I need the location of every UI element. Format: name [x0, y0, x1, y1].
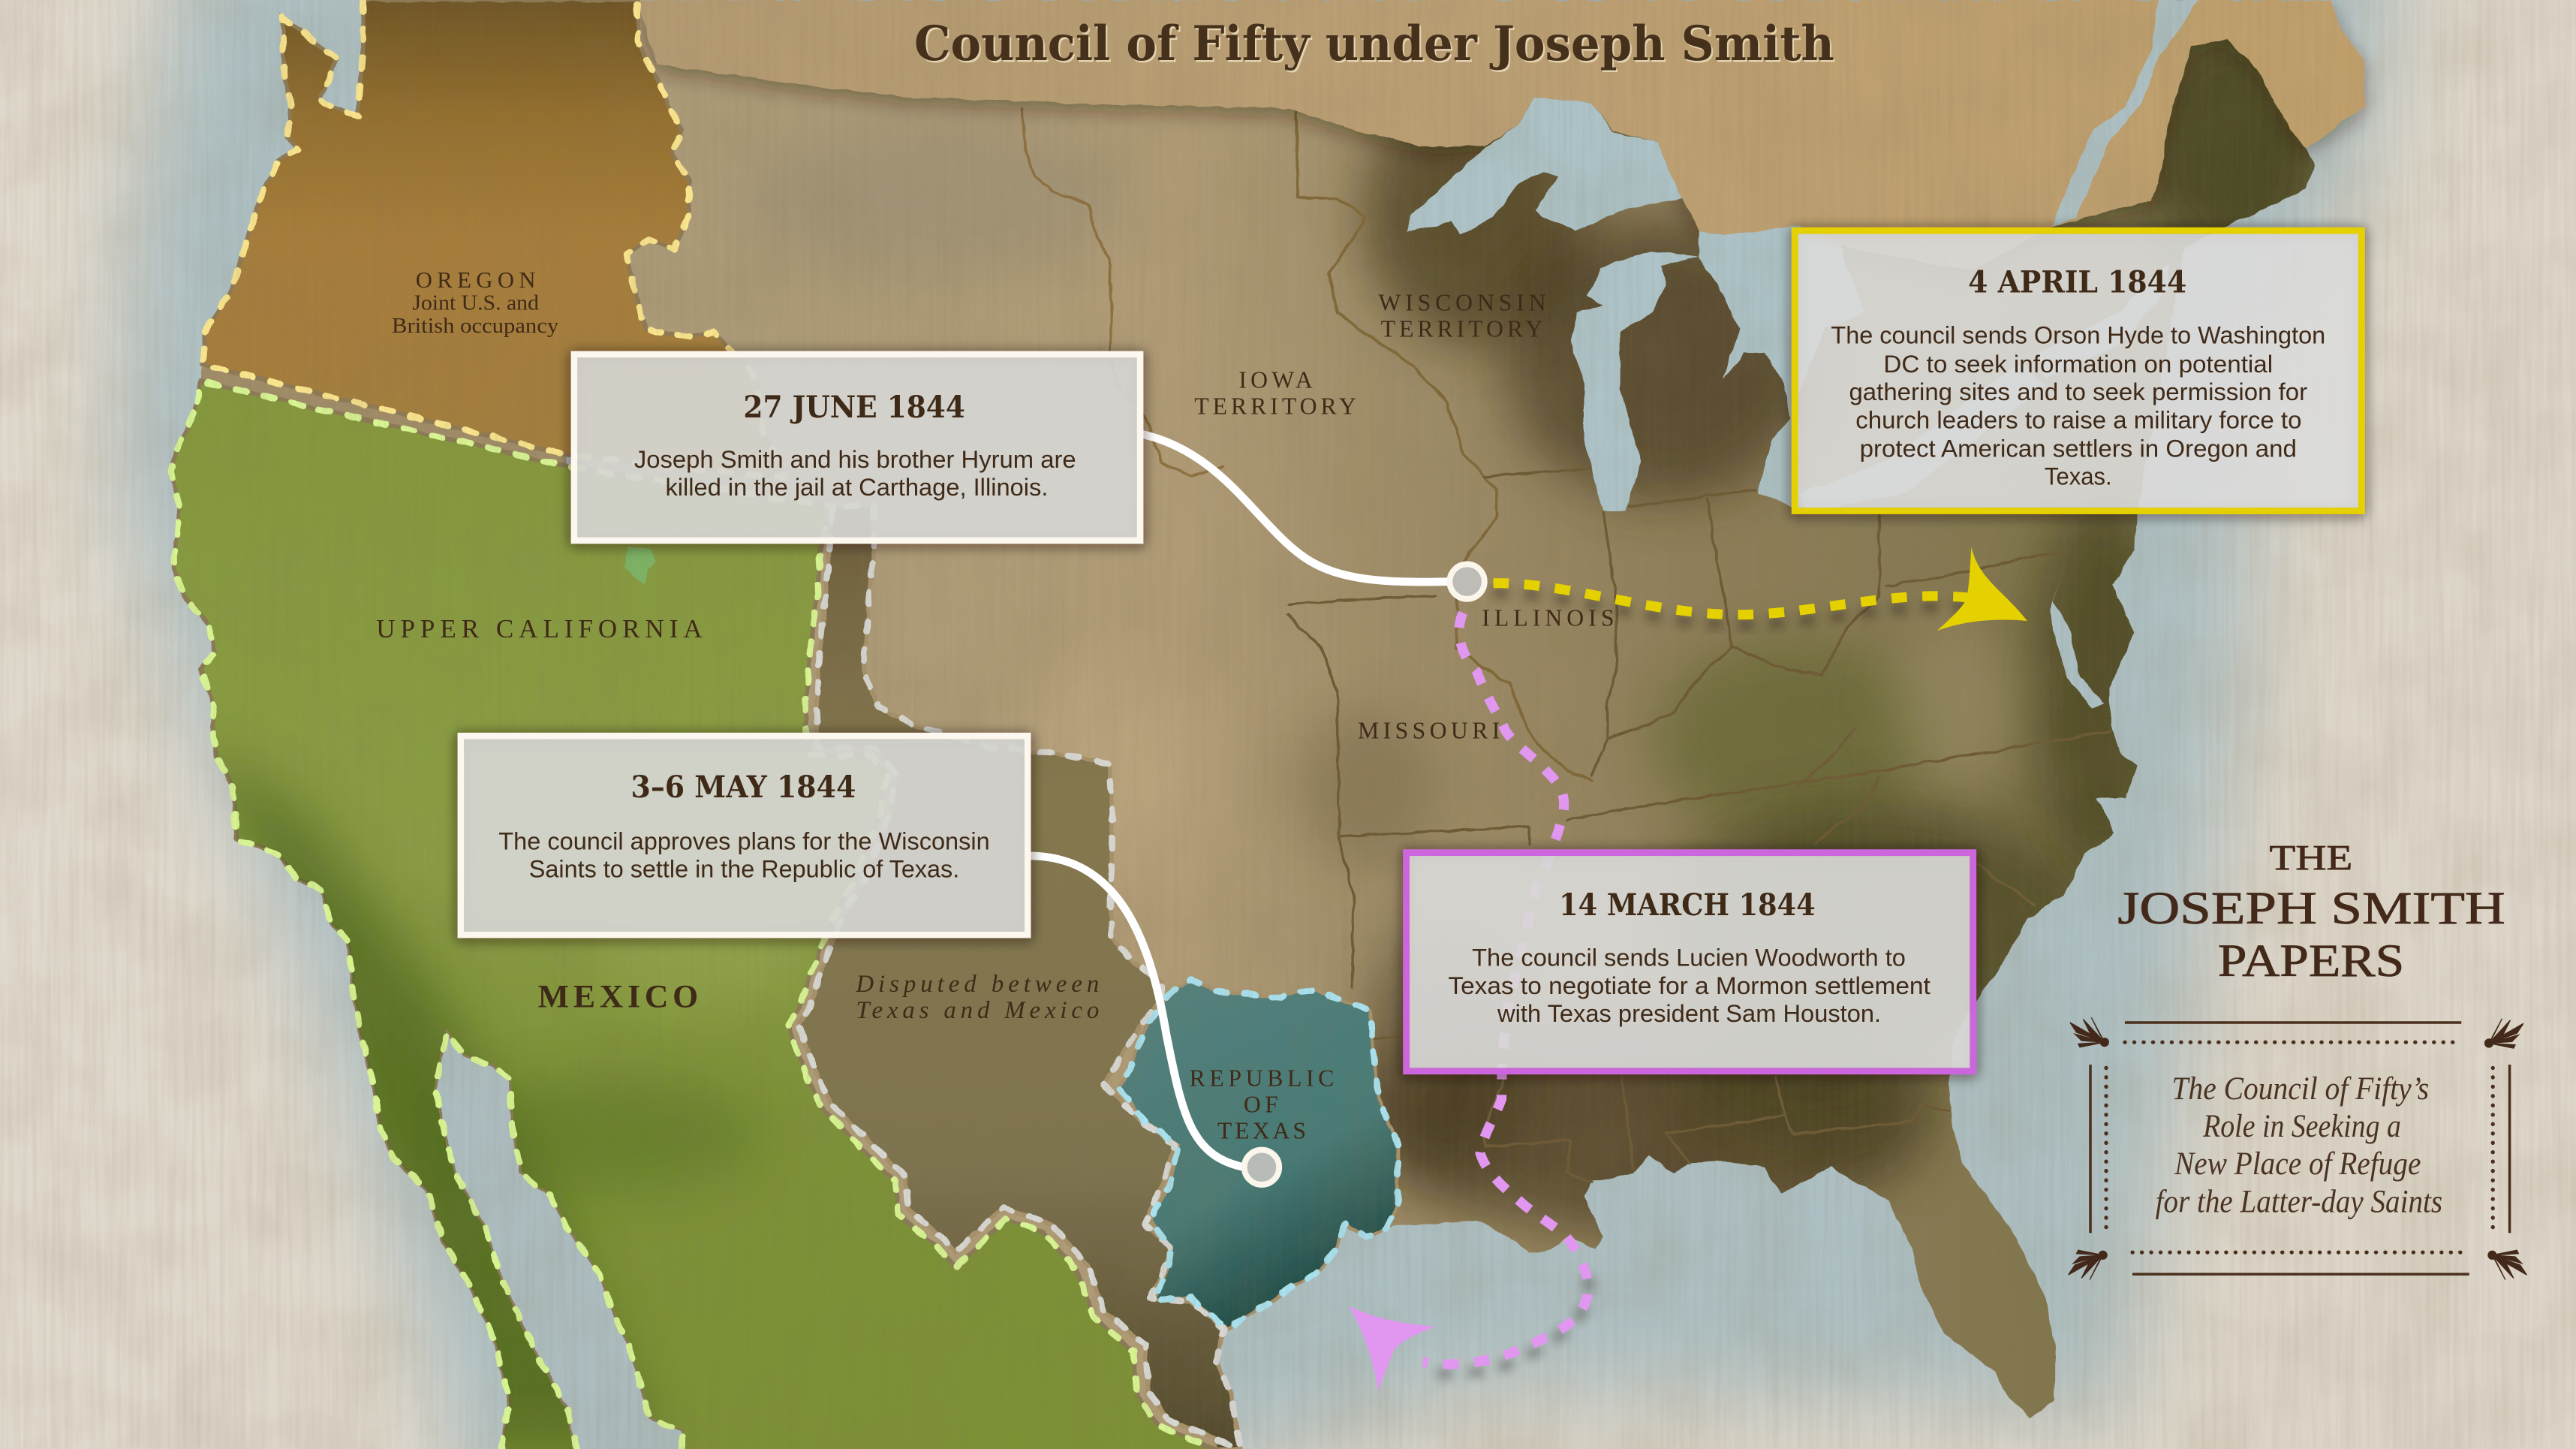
label: Oregon: OREGON — [416, 267, 536, 293]
subtitle: The Council of Fifty’s — [2172, 1071, 2429, 1107]
water: Saint Lawrence River — [2052, 0, 2200, 227]
title: Council of Fifty under Joseph Smith — [916, 17, 1836, 73]
flourish: bottom right — [2488, 1250, 2526, 1280]
dashed border: disputed territory — [799, 506, 1241, 1449]
rivers and state lines — [1022, 108, 2156, 1183]
dashed border: Republic of Texas — [1121, 979, 1398, 1329]
water: Lake Erie and Lake Ontario — [1799, 361, 2045, 513]
label: Wisconsin Territory: WISCONSIN — [1378, 290, 1546, 316]
water: Lake Huron — [1699, 227, 1864, 509]
seam between Oregon and Upper California — [200, 365, 567, 466]
label: Wisconsin Territory: TERRITORY — [1381, 316, 1542, 342]
region: Mexico and Upper California — [171, 381, 1248, 1449]
body text: protect American settlers in Oregon and — [1860, 434, 2297, 462]
subtitle: for the Latter-day Saints — [2156, 1183, 2442, 1219]
label: Upper California: UPPER CALIFORNIA — [376, 614, 703, 643]
label: Oregon: Joint U.S. and — [412, 291, 539, 315]
label: Iowa Territory: IOWA — [1238, 366, 1313, 393]
arrowhead: pink — [1349, 1306, 1436, 1391]
body text: killed in the jail at Carthage, Illinois. — [665, 473, 1048, 501]
subtitle: New Place of Refuge — [2174, 1146, 2421, 1182]
body text: Texas. — [2045, 462, 2112, 490]
marker: Carthage, Illinois — [1449, 564, 1485, 599]
water: Gulf of California — [435, 1032, 682, 1449]
route: Orson Hyde to Washington, yellow dashed — [1494, 547, 2027, 631]
logo: The Joseph Smith Papers — [2117, 839, 2505, 987]
body text — [1448, 944, 1930, 1027]
label: Republic of Texas: OF — [1244, 1091, 1278, 1117]
label: Mexico: MEXICO — [538, 978, 698, 1014]
dashed border: Oregon — [202, 0, 785, 478]
land: United States — [567, 0, 2315, 1449]
marker: Republic of Texas settlement — [1244, 1150, 1279, 1185]
land: Canada — [637, 0, 2364, 271]
label: Republic of Texas — [1190, 1065, 1334, 1143]
label: Republic of Texas: TEXAS — [1217, 1117, 1306, 1143]
body text: with Texas president Sam Houston. — [1497, 999, 1881, 1027]
title: Council of Fifty under Joseph Smith — [914, 15, 1834, 71]
route: April mission shadow — [1494, 593, 1972, 625]
heading: 3–6 MAY 1844 — [630, 769, 856, 805]
green stain near Upper California — [624, 545, 655, 585]
body text: gathering sites and to seek permission for — [1849, 378, 2307, 405]
body text: The council sends Lucien Woodworth to — [1472, 944, 1906, 972]
label: Republic of Texas: REPUBLIC — [1190, 1065, 1334, 1091]
body text — [498, 827, 990, 883]
body text: DC to seek information on potential — [1883, 350, 2273, 378]
body text: Texas to negotiate for a Mormon settlement — [1448, 972, 1930, 999]
water: Lake Superior — [1407, 98, 1682, 235]
logo: The Joseph Smith Papers: THE — [2270, 839, 2352, 878]
heading: 4 APRIL 1844 — [1968, 264, 2186, 300]
body text — [634, 445, 1076, 501]
shading: Mexican west coast and Baja — [197, 740, 821, 1449]
label: Disputed between Texas and Mexico: Disputed between — [855, 971, 1099, 998]
label: Missouri: MISSOURI — [1358, 718, 1500, 744]
callout: 3-6 May 1844 — [461, 736, 1028, 935]
dashed border: Mexico west coast — [171, 402, 510, 1449]
ornamental frame — [2069, 1017, 2526, 1280]
connector: 3-6 May box to Texas — [1027, 856, 1248, 1168]
callout: 4 April 1844 — [1795, 230, 2361, 511]
water: Lake Michigan — [1570, 252, 1699, 511]
land shading — [739, 17, 2333, 1232]
region: Republic of Texas — [1121, 979, 1398, 1329]
water: Chesapeake Bay — [2051, 578, 2105, 708]
connector: 27 June box to Carthage — [1140, 434, 1454, 582]
callout: 27 June 1844 — [574, 354, 1140, 541]
body text: The council approves plans for the Wisconsin — [498, 827, 990, 854]
arrowhead: yellow — [1937, 547, 2027, 631]
region: Oregon Country — [202, 0, 785, 478]
flourish: bottom left — [2069, 1250, 2107, 1280]
route: March mission shadow — [1422, 1276, 1589, 1374]
label: Disputed between Texas and Mexico: Texas and Mexico — [856, 997, 1099, 1024]
route: Lucien Woodworth to Texas, pink dashed — [1349, 613, 1588, 1391]
body text — [1831, 321, 2325, 490]
logo: The Joseph Smith Papers: JOSEPH SMITH — [2117, 883, 2505, 934]
logo: The Joseph Smith Papers: PAPERS — [2218, 935, 2404, 987]
label: Oregon: British occupancy — [392, 315, 559, 338]
heading: 14 MARCH 1844 — [1559, 887, 1816, 923]
dashed border: Mexico — [197, 381, 1208, 1446]
label: Illinois: ILLINOIS — [1482, 605, 1614, 631]
heading: 27 JUNE 1844 — [743, 389, 965, 425]
body text: The council sends Orson Hyde to Washington — [1831, 321, 2325, 348]
map labels — [376, 267, 1614, 1143]
callout: 14 March 1844 — [1407, 853, 1973, 1071]
subtitle: Role in Seeking a — [2202, 1108, 2401, 1144]
region: disputed territory — [799, 506, 1241, 1449]
body text: Saints to settle in the Republic of Texas. — [529, 855, 959, 883]
subtitle — [2156, 1071, 2442, 1219]
flourish: top left — [2070, 1017, 2108, 1047]
label: Wisconsin Territory — [1378, 290, 1546, 342]
label: Iowa Territory: TERRITORY — [1194, 393, 1356, 419]
flourish: top right — [2485, 1019, 2523, 1048]
body text: Joseph Smith and his brother Hyrum are — [634, 445, 1076, 473]
body text: church leaders to raise a military force to — [1855, 406, 2301, 434]
label: Iowa Territory — [1194, 366, 1356, 419]
label: Disputed between Texas and Mexico — [855, 971, 1099, 1024]
label: Oregon — [392, 267, 559, 338]
dashed border: Gulf of California — [435, 1032, 682, 1449]
